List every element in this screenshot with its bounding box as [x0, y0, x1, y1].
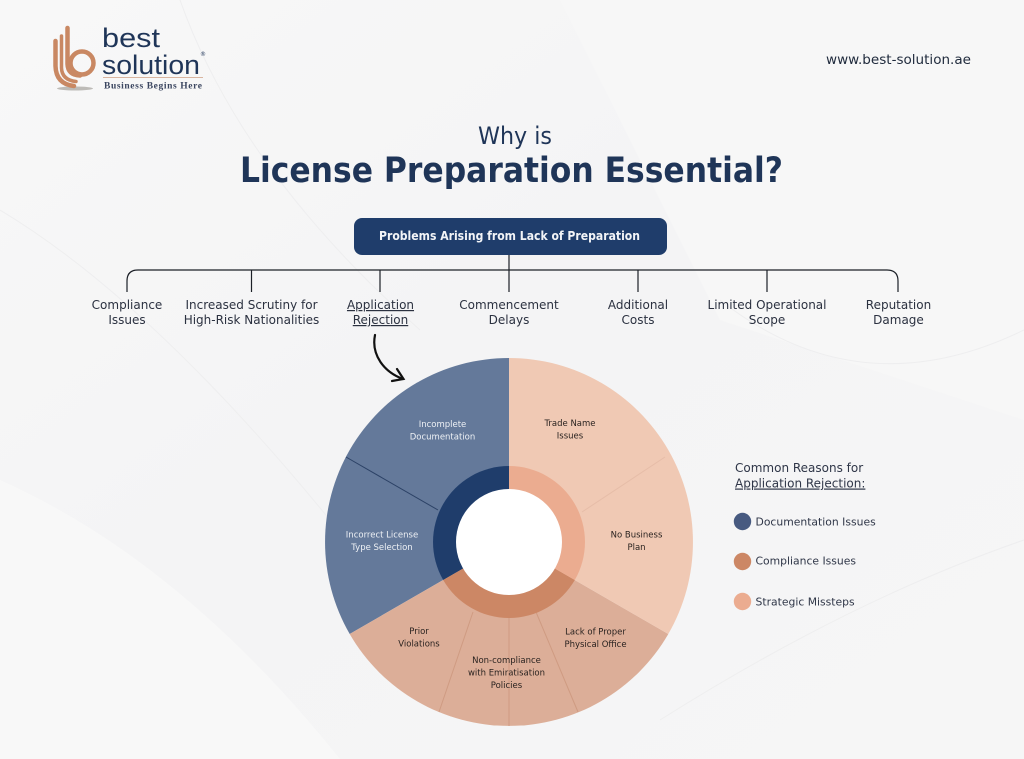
- legend: strategic missteps: Strategic Missteps: [756, 596, 855, 608]
- label: incorrect license: Type Selection: [350, 543, 413, 553]
- label: incomplete documentation: Incomplete: [419, 420, 466, 430]
- segment: documentation: [325, 358, 509, 634]
- problem labels: [92, 298, 931, 327]
- legend: [734, 461, 876, 610]
- connector tree: [127, 255, 898, 292]
- label: emiratisation: with Emiratisation: [468, 668, 545, 678]
- segment labels: [346, 419, 663, 691]
- header box: problems: [354, 218, 667, 255]
- label: reputation damage: Damage: [873, 313, 924, 327]
- logo wordmark: solution: [102, 50, 200, 80]
- label: physical office: Lack of Proper: [565, 628, 626, 638]
- legend title: Application Rejection:: [735, 476, 865, 490]
- label: application rejection: Application: [347, 298, 414, 312]
- label: no business plan: No Business: [611, 530, 663, 540]
- arrow to chart: [374, 335, 404, 381]
- label: compliance issues: Issues: [108, 313, 146, 327]
- website url: www.best-solution.ae: [826, 53, 971, 68]
- logo: [56, 23, 206, 92]
- label: increased scrutiny: Increased Scrutiny for: [185, 298, 318, 312]
- label: emiratisation: Non-compliance: [472, 656, 541, 666]
- segment: strategic: [509, 358, 693, 634]
- logo wordmark: best: [102, 23, 161, 53]
- legend: strategic missteps: [734, 593, 855, 610]
- label: additional costs: Additional: [608, 298, 668, 312]
- legend: compliance issues: [734, 553, 856, 570]
- logo wordmark: Business Begins Here: [104, 82, 202, 92]
- label: prior violations: Violations: [398, 640, 440, 650]
- ring: strategic: [509, 466, 585, 580]
- label: trade name: Issues: [557, 432, 584, 442]
- label: trade name: Trade Name: [543, 419, 596, 429]
- label: incomplete documentation: Documentation: [410, 432, 475, 442]
- label: compliance issues: Compliance: [92, 298, 162, 312]
- label: physical office: Physical Office: [564, 640, 627, 650]
- logo wordmark: ®: [200, 51, 206, 58]
- legend: documentation issues: [734, 513, 876, 530]
- ring: compliance: [443, 542, 575, 618]
- label: reputation damage: Reputation: [866, 298, 931, 312]
- label: limited operational scope: Scope: [749, 313, 785, 327]
- legend title: Common Reasons for: [735, 461, 863, 475]
- label: prior violations: Prior: [409, 627, 429, 637]
- icon: hand b mark: [56, 28, 94, 90]
- donut chart: [325, 358, 693, 726]
- label: additional costs: Costs: [622, 313, 654, 327]
- legend: compliance issues: Compliance Issues: [756, 554, 856, 568]
- title: Why is: [478, 122, 552, 150]
- ring: documentation: [433, 466, 509, 580]
- logo wordmark: [102, 23, 206, 92]
- label: emiratisation: Policies: [491, 681, 523, 691]
- label: increased scrutiny: High-Risk Nationalities: [184, 313, 319, 327]
- header box: problems: Problems Arising from Lack of Preparation: [379, 229, 640, 243]
- label: application rejection: Rejection: [353, 313, 408, 327]
- center hole: [456, 489, 562, 595]
- legend: documentation issues: Documentation Issues: [756, 516, 876, 528]
- label: incorrect license: Incorrect License: [346, 530, 418, 540]
- label: no business plan: Plan: [627, 543, 646, 553]
- label: commencement delays: Commencement: [459, 298, 559, 312]
- title: [240, 122, 783, 191]
- label: commencement delays: Delays: [489, 313, 529, 327]
- segment: compliance: [350, 542, 668, 726]
- title: License Preparation Essential?: [240, 151, 783, 191]
- label: limited operational scope: Limited Operational: [708, 298, 826, 312]
